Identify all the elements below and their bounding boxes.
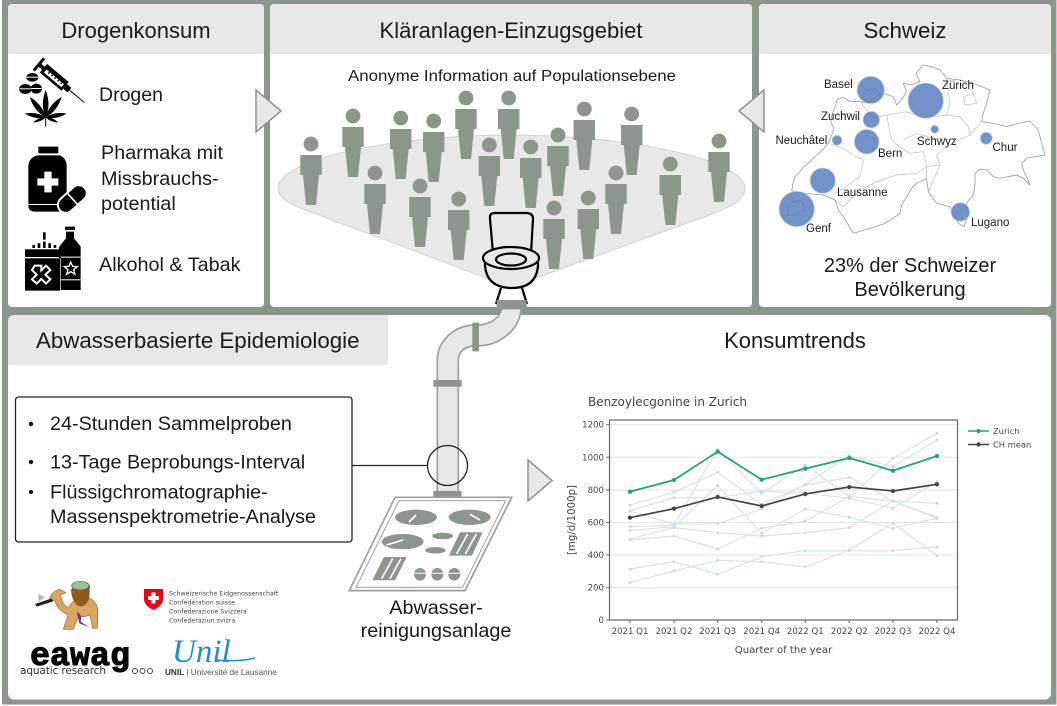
x axis labels: 2021 Q2	[656, 627, 692, 637]
map labels: Lugano	[971, 217, 1009, 229]
text: Pharmaka mit Missbrauchspotential: Missbrauchs-	[101, 168, 219, 190]
logo: Swiss Confederation: Confederaziun svizra	[169, 618, 235, 624]
arrow: to consumption trends	[528, 460, 552, 501]
y axis labels	[582, 421, 604, 626]
y axis labels: 0	[599, 616, 604, 626]
map labels: Lausanne	[837, 187, 888, 199]
text box: methods: 24-Stunden Sammelproben	[50, 413, 292, 435]
logo: UNIL: UNIL | Université de Lausanne	[165, 668, 277, 677]
text box: methods: 13-Tage Beprobungs-Interval	[50, 452, 305, 474]
text: Alkohol & Tabak: Alkohol & Tabak	[99, 254, 241, 276]
heading: Schweiz: Schweiz	[863, 18, 947, 43]
text: Abwasserreinigungsanlage: Abwasser-	[389, 597, 483, 619]
arrow: right from Drogenkonsum	[256, 90, 281, 132]
connector line and magnifier circle	[352, 446, 468, 486]
x axis labels: 2022 Q2	[831, 627, 868, 637]
map labels	[776, 79, 1018, 235]
panel: Schweiz	[759, 4, 1051, 307]
logo: Swiss Confederation	[144, 589, 279, 624]
panel: Drogenkonsum	[8, 4, 264, 307]
heading: Kläranlagen-Einzugsgebiet	[270, 4, 752, 54]
heading: Drogenkonsum: Drogenkonsum	[61, 18, 211, 43]
bubbles: sampling sites	[779, 76, 992, 227]
text: Pharmaka mit Missbrauchspotential	[101, 142, 224, 215]
y axis labels: 1200	[582, 421, 604, 431]
panel: Kläranlagen-Einzugsgebiet	[270, 4, 752, 307]
logo: UNIL	[165, 634, 277, 677]
text: Abwasserreinigungsanlage	[361, 597, 511, 642]
heading: Drogenkonsum	[8, 4, 264, 54]
logo: eawag: eawag	[30, 638, 130, 675]
y axis title: [mg/d/1000p]	[567, 485, 578, 555]
map labels: Bern	[878, 148, 902, 160]
text: Pharmaka mit Missbrauchspotential: Pharmaka mit	[101, 142, 224, 164]
frame and axes	[606, 420, 958, 623]
panel: lower	[8, 300, 1051, 700]
logo: Swiss Confederation: Confédération suisse	[169, 598, 235, 606]
x axis labels: 2022 Q1	[787, 627, 824, 637]
legend: Zurich	[993, 426, 1019, 436]
map of Switzerland	[787, 65, 1045, 233]
y axis labels: 800	[588, 486, 604, 496]
icon: toilet	[483, 213, 539, 304]
icon: tobacco and alcohol bottle	[25, 227, 81, 291]
funnel: catchment area	[278, 135, 745, 282]
heading: Schweiz	[759, 4, 1051, 54]
text: Anonyme Information: Anonyme Information auf Populationsebene	[348, 68, 676, 85]
x axis labels	[612, 627, 955, 637]
logo: eawag: aquatic research	[20, 665, 106, 677]
text box: methods: Massenspektrometrie-Analyse	[50, 506, 316, 528]
chart title: Benzoylecgonine in Zurich	[588, 395, 747, 409]
series: Zurich	[628, 449, 939, 494]
legend	[968, 426, 1031, 450]
icon: medicine bottle and capsule	[28, 147, 90, 216]
series: CH mean	[628, 482, 939, 520]
map labels: Chur	[992, 142, 1018, 154]
logo: Swiss Confederation: Schweizerische Eidgenossenschaft	[169, 590, 279, 598]
x axis title: Quarter of the year	[735, 645, 833, 656]
y axis labels: 400	[588, 551, 604, 561]
chart: Benzoylecgonine in Zurich	[567, 395, 1031, 656]
y axis labels: 1000	[582, 453, 604, 463]
icon: wastewater treatment plant	[349, 497, 512, 591]
logo: Swiss Confederation: Confederazione Svizzera	[169, 608, 247, 616]
map labels: Basel	[824, 79, 853, 91]
logo: UNIL: Unil	[172, 634, 231, 670]
map labels: Zürich	[942, 80, 974, 92]
text: 23% der Schweizer Bevölkerung: 23% der Schweizer	[824, 255, 996, 277]
map labels: Neuchâtel	[776, 135, 827, 147]
text: 23% der Schweizer Bevölkerung	[824, 255, 996, 301]
x axis labels: 2022 Q3	[875, 627, 911, 637]
legend: CH mean	[993, 440, 1031, 450]
x axis labels: 2021 Q4	[743, 627, 780, 637]
gridlines	[610, 425, 957, 588]
map labels: Zuchwil	[821, 111, 860, 123]
pipe	[433, 300, 527, 498]
arrow: left from Schweiz	[739, 90, 764, 132]
logo: camel	[35, 581, 98, 629]
heading: Kläranlagen-Einzugsgebiet: Kläranlagen-Einzugsgebiet	[380, 18, 642, 43]
map labels: Genf	[806, 223, 832, 235]
x axis labels: 2022 Q4	[919, 627, 955, 637]
map labels: Schwyz	[917, 136, 957, 148]
people	[300, 91, 730, 269]
text box: methods: Flüssigchromatographie-	[50, 482, 268, 504]
text: Abwasserreinigungsanlage: reinigungsanlage	[361, 620, 511, 642]
x axis labels: 2021 Q1	[612, 627, 648, 637]
heading: Abwasserbasierte Epidemiologie: Abwasserbasierte Epidemiologie	[36, 328, 359, 353]
text: 23% der Schweizer Bevölkerung: Bevölkerung	[854, 279, 966, 301]
icon: syringe, pills and cannabis leaf	[19, 57, 89, 127]
y axis labels: 600	[588, 518, 604, 528]
y axis labels: 200	[588, 584, 604, 594]
text: Pharmaka mit Missbrauchspotential: potential	[101, 193, 176, 215]
text box: methods	[16, 397, 352, 542]
text: Drogen: Drogen	[99, 84, 163, 106]
background series	[630, 433, 937, 583]
heading: Konsumtrends: Konsumtrends	[724, 328, 866, 353]
x axis labels: 2021 Q3	[699, 627, 736, 637]
heading: Abwasserbasierte Epidemiologie	[8, 315, 388, 365]
